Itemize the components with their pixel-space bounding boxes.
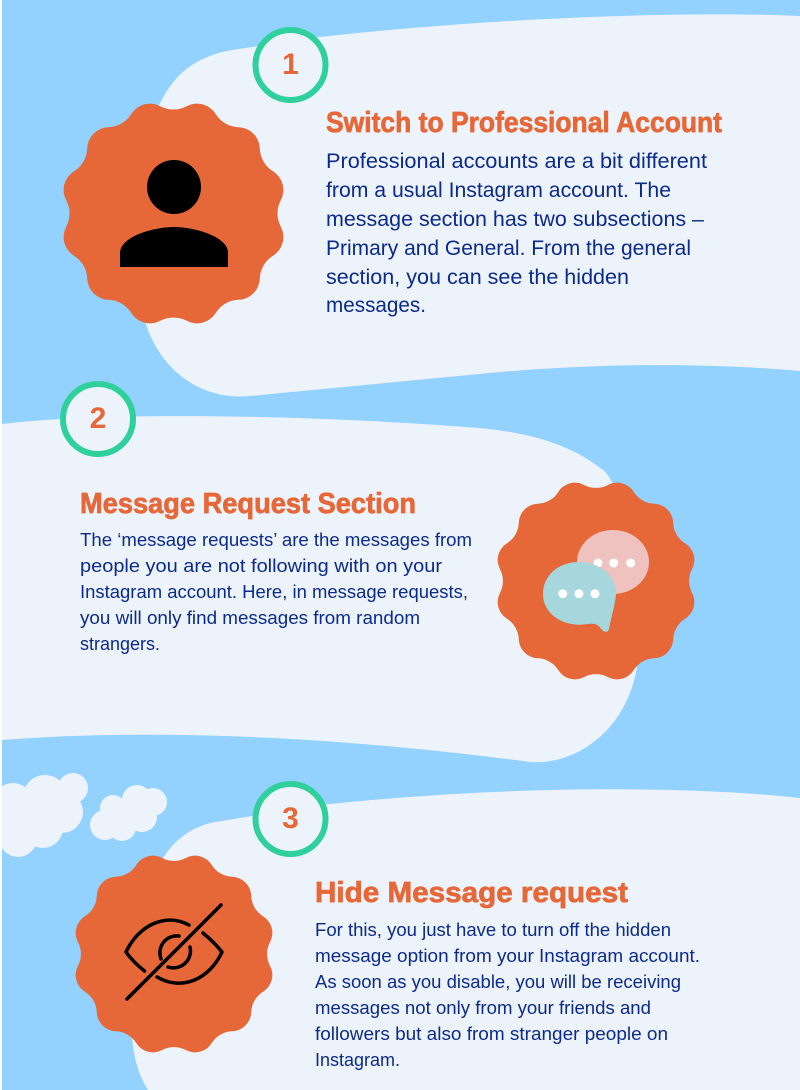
- text block: step 3: followers but also from stranger people on: [315, 1023, 668, 1044]
- text block: step 3: message option from your Instagram account.: [315, 945, 700, 966]
- panel: step 2 background: [2, 416, 638, 762]
- number badge 1: [256, 30, 326, 100]
- text block: step 3: As soon as you disable, you will be receiving: [315, 971, 681, 992]
- heading: step 1: Switch to Professional Account: [326, 107, 722, 139]
- text block: step 1: Professional accounts are a bit different: [326, 150, 707, 173]
- heading: step 3: Hide Message request: [315, 877, 628, 909]
- number badge 1: 1: [282, 48, 299, 81]
- number badge 3: 3: [282, 802, 299, 835]
- text block: step 1: messages.: [326, 294, 426, 317]
- text block: step 2: Instagram account. Here, in message requests,: [80, 581, 468, 602]
- text block: step 2: The ‘message requests’ are the messages from: [80, 529, 472, 550]
- icon: person badge: [64, 104, 283, 323]
- text block: step 3: messages not only from your friends and: [315, 997, 651, 1018]
- text block: step 1: [326, 150, 707, 317]
- number badge 2: 2: [90, 402, 106, 435]
- text block: step 3: [315, 919, 700, 1070]
- heading: step 2: Message Request Section: [80, 488, 416, 520]
- number badge 3: [256, 784, 326, 854]
- text block: step 2: [80, 529, 472, 654]
- icon: hidden eye badge: [76, 856, 272, 1052]
- icon: small cloud: [90, 785, 167, 841]
- text block: step 1: section, you can see the hidden: [326, 266, 629, 289]
- number badge 2: [63, 384, 133, 454]
- text block: step 1: Primary and General. From the general: [326, 237, 691, 260]
- text block: step 1: from a usual Instagram account. The: [326, 179, 671, 202]
- panel: step 3 background: [132, 789, 800, 1090]
- text block: step 3: For this, you just have to turn off the hidden: [315, 919, 671, 940]
- icon: chat bubbles badge: [498, 483, 694, 679]
- text block: step 2: strangers.: [80, 633, 160, 654]
- text block: step 3: Instagram.: [315, 1049, 400, 1070]
- text block: step 2: people you are not following with on your: [80, 555, 442, 576]
- left edge strip: [0, 0, 2, 1090]
- icon: large cloud: [0, 773, 88, 857]
- text block: step 2: you will only find messages from random: [80, 607, 420, 628]
- panel: step 1 background: [137, 14, 800, 396]
- text block: step 1: message section has two subsections –: [326, 208, 704, 231]
